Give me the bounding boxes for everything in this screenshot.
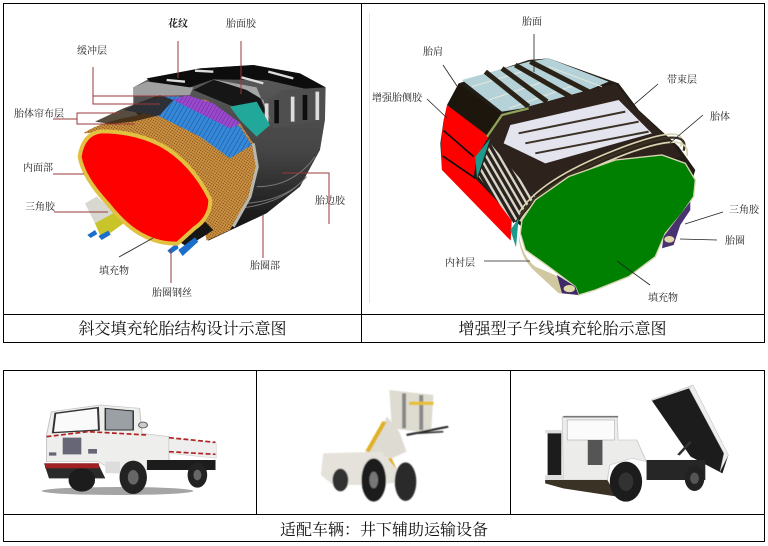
top table frame	[4, 4, 764, 342]
part labels: bias: 填充物	[99, 264, 129, 277]
tyre illustration: bias	[82, 65, 326, 256]
part labels: bias: 内面部	[23, 161, 53, 174]
part labels: bias: 胎圈部	[250, 259, 280, 272]
vehicle photo: flatbed mine truck	[42, 405, 216, 495]
part labels: bias: 花纹	[168, 17, 188, 30]
part labels: radial: 胎圈	[725, 235, 745, 247]
part labels: radial: 增强胎侧胶	[372, 91, 423, 104]
part labels: radial: 胎面	[522, 16, 542, 28]
part labels: bias: 三角胶	[25, 200, 56, 213]
tyre illustration: radial	[440, 58, 695, 295]
part labels: bias: 胎边胶	[315, 194, 346, 207]
leader lines: bias	[53, 41, 329, 283]
caption: bias tyre: 斜交填充轮胎结构设计示意图	[78, 319, 287, 338]
faint left edge line	[368, 13, 370, 303]
bottom table frame	[4, 370, 764, 542]
part labels: radial: 胎肩	[423, 45, 443, 58]
leader lines: radial	[427, 34, 723, 285]
panel: bias filled tyre diagram	[14, 17, 346, 299]
part labels: radial: 胎体	[710, 110, 730, 123]
vehicle photo: mine forklift loader	[321, 390, 448, 502]
part labels: radial: 内衬层	[445, 256, 475, 269]
part labels: radial: 三角胶	[729, 203, 760, 216]
part labels: bias	[14, 17, 346, 299]
part labels: bias: 胎圈钢丝	[152, 286, 192, 299]
vehicle photo: tipping dump truck	[545, 385, 728, 502]
part labels: radial: 填充物	[648, 291, 678, 304]
part labels: bias: 缓冲层	[77, 44, 107, 57]
part labels: radial: 带束层	[667, 73, 697, 86]
caption: radial tyre: 增强型子午线填充轮胎示意图	[458, 319, 667, 338]
part labels: bias: 胎面胶	[226, 17, 257, 30]
part labels: radial	[372, 16, 760, 304]
panel: radial filled tyre diagram	[370, 13, 760, 304]
part labels: bias: 胎体帘布层	[14, 107, 64, 120]
caption: adapted vehicles: 适配车辆：井下辅助运输设备	[280, 521, 488, 539]
